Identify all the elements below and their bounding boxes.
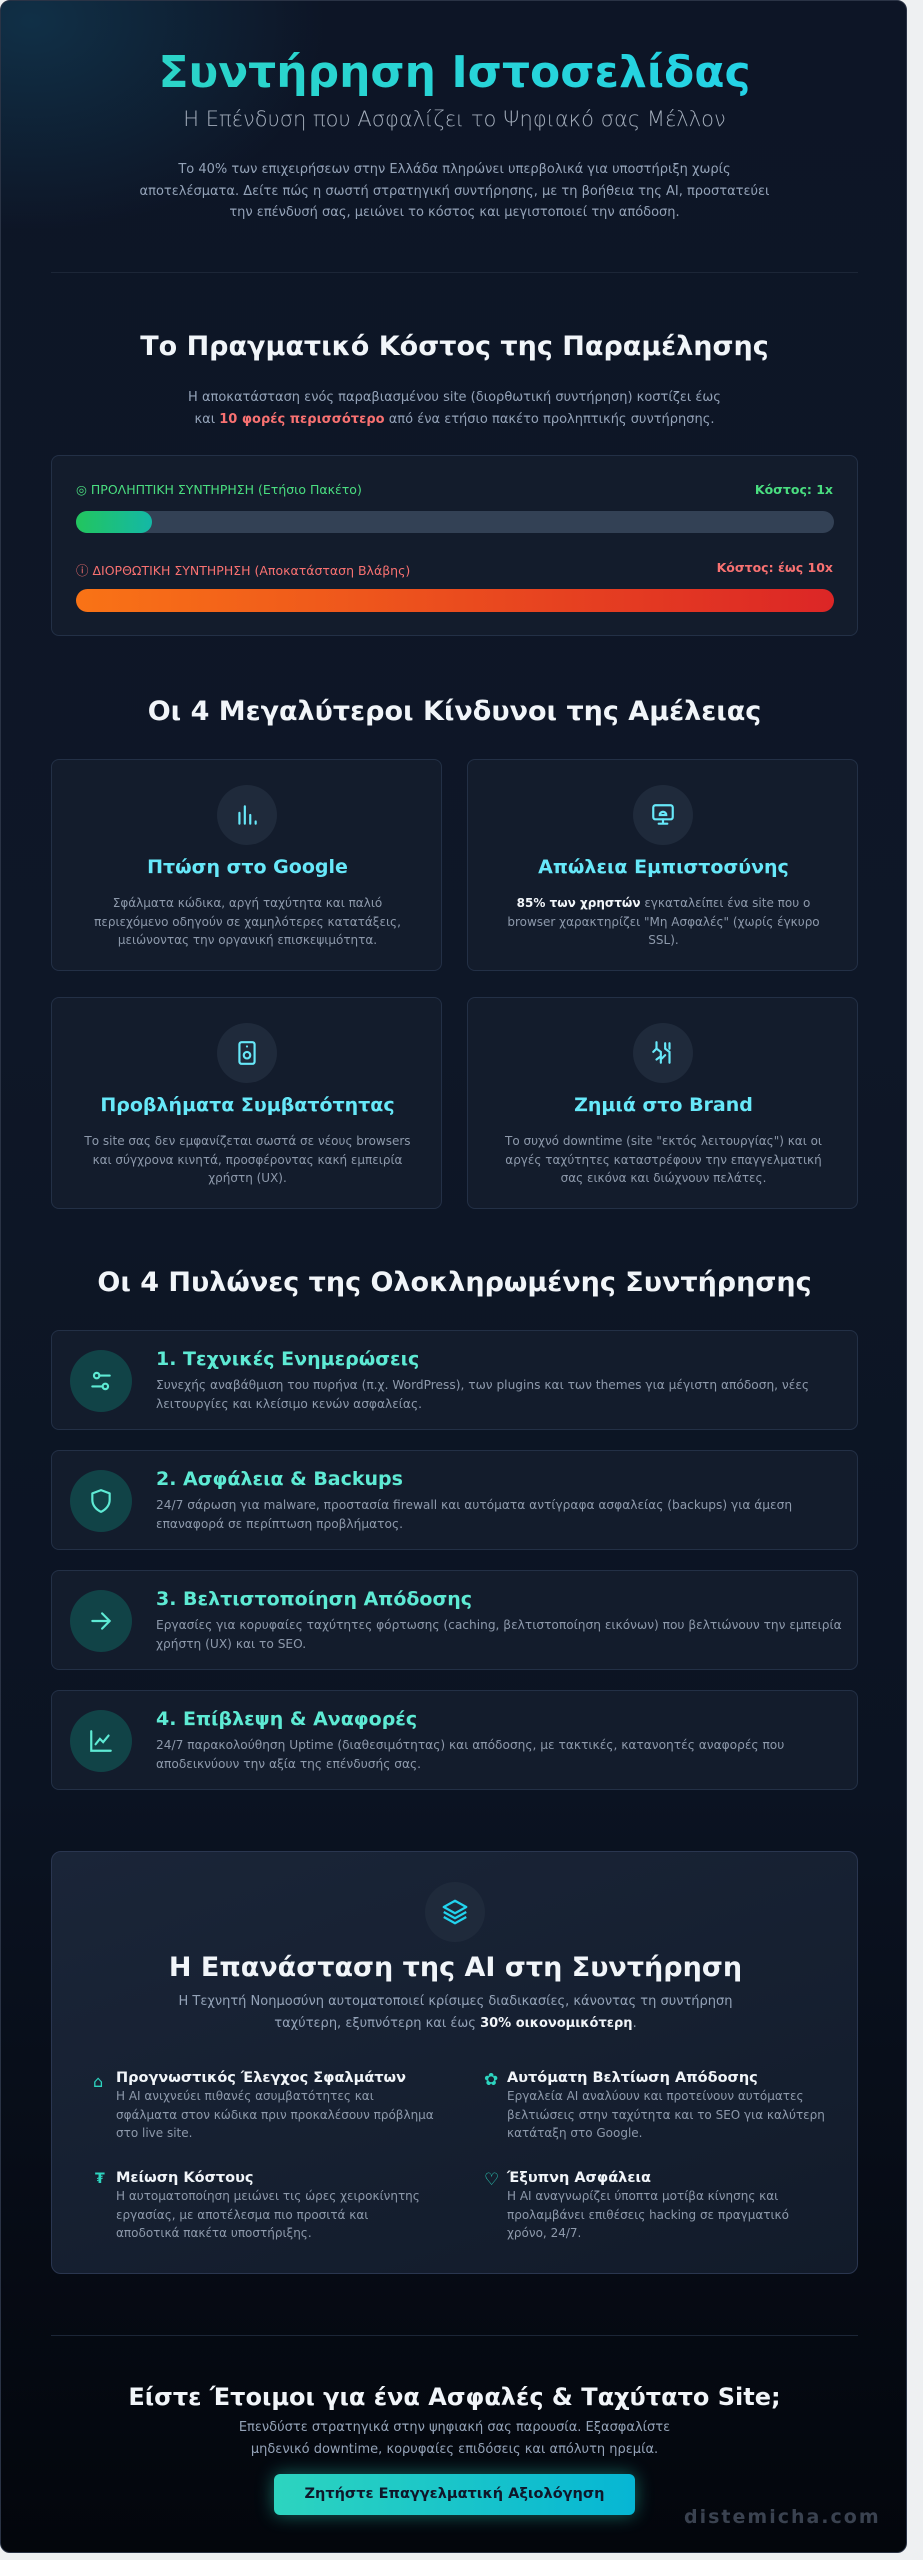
pillar text: 24/7 σάρωση για malware, προστασία firewall και αυτόματα αντίγραφα ασφαλείας (backups) για άμεση: [156, 1498, 792, 1512]
AI text: Η Τεχνητή Νοημοσύνη αυτοματοποιεί κρίσιμες διαδικασίες, κάνοντας τη συντήρηση: [178, 1994, 733, 2009]
pillar text: Συνεχής αναβάθμιση του πυρήνα (π.χ. WordPress), των plugins και των themes για μέγιστη απόδοση, νέες: [156, 1378, 809, 1392]
pillar text: αποδεικνύουν την αξία της επένδυσής σας.: [156, 1756, 421, 1770]
icon: bars: [217, 785, 277, 845]
risk text: Το site σας δεν εμφανίζεται σωστά σε νέους browsers και σύγχρονα κινητά, προσφέροντας κακή εμπειρία χρήστη (UX).: [84, 1134, 411, 1185]
cost text: [188, 390, 721, 426]
title: [1, 47, 908, 98]
icon: arrow: [70, 1590, 132, 1652]
icon: sliders: [70, 1350, 132, 1412]
icon: layers: [425, 1882, 485, 1942]
feature: cost: Μείωση Κόστους: [116, 2170, 254, 2186]
bar: corrective: [76, 589, 834, 612]
feature: smart security: προλαμβάνει επιθέσεις hacking σε πραγματικό: [507, 2208, 789, 2222]
pillar 2: [51, 1450, 858, 1550]
cost text: και 10 φορές περισσότερο από ένα ετήσιο πακέτο προληπτικής συντήρησης.: [194, 412, 715, 426]
subtitle: Η Επένδυση που Ασφαλίζει το Ψηφιακό σας Μέλλον: [183, 107, 726, 131]
risk title: Προβλήματα Συμβατότητας: [100, 1094, 395, 1116]
feature: cost: αποδοτικά πακέτα υποστήριξης.: [116, 2226, 312, 2240]
icon: monitor: [633, 785, 693, 845]
icon: ✿: [484, 2070, 498, 2090]
pillar text: επαναφορά σε περίπτωση προβλήματος.: [156, 1516, 403, 1530]
CTA text: Επενδύστε στρατηγικά στην ψηφιακή σας παρουσία. Εξασφαλίστε: [239, 2420, 670, 2435]
panel: AI revolution: [51, 1851, 858, 2274]
icon: ♡: [484, 2170, 499, 2190]
feature: predictive: σφάλματα στον κώδικα πριν προκαλέσουν πρόβλημα: [116, 2108, 434, 2122]
panel: risk compatibility: [51, 997, 442, 1209]
feature: smart security: χρόνο, 24/7.: [507, 2226, 581, 2240]
label: corrective: ⓘ ΔΙΟΡΘΩΤΙΚΗ ΣΥΝΤΗΡΗΣΗ (Αποκατάσταση Βλάβης): [76, 563, 410, 578]
pillar title: 4. Επίβλεψη & Αναφορές: [156, 1708, 417, 1730]
heading: cost of neglect: Το Πραγματικό Κόστος της Παραμέλησης: [140, 331, 769, 362]
icon: ⌂: [93, 2072, 103, 2091]
intro text: αποτελέσματα. Δείτε πώς η σωστή στρατηγική συντήρησης, με τη βοήθεια της AI, προστατεύει: [140, 184, 769, 198]
AI text: [178, 1994, 733, 2030]
value: 1x: Κόστος: 1x: [755, 482, 833, 497]
icon: ₮: [95, 2171, 105, 2187]
icon: shield: [70, 1470, 132, 1532]
pillar text: [156, 1618, 842, 1650]
feature: smart security: [484, 2170, 789, 2240]
cost text: Η αποκατάσταση ενός παραβιασμένου site (διορθωτική συντήρηση) κοστίζει έως: [188, 390, 721, 405]
feature: predictive: Η AI ανιχνεύει πιθανές ασυμβατότητες και: [116, 2089, 374, 2103]
pillar text: [156, 1498, 792, 1530]
CTA button: Ζητήστε Επαγγελματική Αξιολόγηση: [304, 2486, 604, 2502]
risk title: Απώλεια Εμπιστοσύνης: [538, 856, 789, 878]
pillar 1: [51, 1330, 858, 1430]
panel: risk trust: [467, 759, 858, 971]
feature: cost: Η αυτοματοποίηση μειώνει τις ώρες χειροκίνητης: [116, 2189, 420, 2203]
CTA heading: Είστε Έτοιμοι για ένα Ασφαλές & Ταχύτατο Site;: [128, 2383, 781, 2411]
feature: cost: εργασίας, με αποτέλεσμα πιο προσιτά και: [116, 2208, 368, 2222]
feature: smart security: Έξυπνη Ασφάλεια: [507, 2170, 651, 2186]
risk title: Πτώση στο Google: [147, 856, 348, 878]
CTA text: [239, 2420, 670, 2456]
watermark: distemicha.com: [684, 2506, 881, 2528]
risk text: 85% των χρηστών εγκαταλείπει ένα site που ο browser χαρακτηρίζει "Μη Ασφαλές" (χωρίς έγκυρο SSL).: [507, 896, 820, 947]
pillar text: χρήστη (UX) και το SEO.: [156, 1636, 306, 1650]
heading: risks: Οι 4 Μεγαλύτεροι Κίνδυνοι της Αμέλειας: [148, 696, 761, 727]
feature: auto performance: Αυτόματη Βελτίωση Απόδοσης: [507, 2070, 758, 2086]
panel: cost comparison: [51, 455, 858, 636]
feature: cost: [95, 2170, 420, 2240]
icon: device: [217, 1023, 277, 1083]
pillar text: 24/7 παρακολούθηση Uptime (διαθεσιμότητας) και απόδοσης, με τακτικές, κατανοητές αναφορές που: [156, 1738, 784, 1752]
bar: preventive: [76, 511, 834, 533]
label: preventive: ◎ ΠΡΟΛΗΠΤΙΚΗ ΣΥΝΤΗΡΗΣΗ (Ετήσιο Πακέτο): [76, 482, 362, 497]
title: Συντήρηση Ιστοσελίδας: [158, 47, 751, 98]
feature: auto performance: Εργαλεία AI αναλύουν και προτείνουν αυτόματες: [507, 2089, 804, 2103]
pillar 3: [51, 1570, 858, 1670]
pillar title: 2. Ασφάλεια & Backups: [156, 1468, 403, 1490]
pillar 4: [51, 1690, 858, 1790]
intro text: [140, 162, 769, 220]
feature: predictive: Προγνωστικός Έλεγχος Σφαλμάτων: [116, 2070, 406, 2086]
pillar title: 1. Τεχνικές Ενημερώσεις: [156, 1348, 419, 1370]
AI text: ταχύτερη, εξυπνότερη και έως 30% οικονομικότερη.: [274, 2016, 637, 2030]
feature: predictive: στο live site.: [116, 2126, 192, 2140]
risk title: Ζημιά στο Brand: [574, 1094, 753, 1116]
pillar text: [156, 1738, 784, 1770]
pillar text: λειτουργίες και κλείσιμο κενών ασφαλείας.: [156, 1396, 422, 1410]
icon: broken: [633, 1023, 693, 1083]
feature: predictive: [93, 2070, 434, 2140]
risk text: Σφάλματα κώδικα, αργή ταχύτητα και παλιό περιεχόμενο οδηγούν σε χαμηλότερες κατατάξεις, μειώνοντας την οργανική επισκεψιμότητα.: [94, 896, 401, 947]
pillar text: Εργασίες για κορυφαίες ταχύτητες φόρτωσης (caching, βελτιστοποίηση εικόνων) που βελτιώνουν την εμπειρία: [156, 1618, 842, 1632]
feature: smart security: Η AI αναγνωρίζει ύποπτα μοτίβα κίνησης και: [507, 2189, 778, 2203]
heading: pillars: Οι 4 Πυλώνες της Ολοκληρωμένης Συντήρησης: [97, 1267, 812, 1298]
CTA button: [274, 2474, 635, 2515]
pillar text: [156, 1378, 809, 1410]
CTA text: μηδενικό downtime, κορυφαίες επιδόσεις και απόλυτη ηρεμία.: [251, 2442, 658, 2456]
feature: auto performance: βελτιώσεις στην ταχύτητα και το SEO για καλύτερη: [507, 2108, 825, 2122]
value: 10x: Κόστος: έως 10x: [717, 560, 833, 575]
intro text: την επένδυσή σας, μειώνει το κόστος και μεγιστοποιεί την απόδοση.: [229, 205, 680, 220]
intro text: Το 40% των επιχειρήσεων στην Ελλάδα πληρώνει υπερβολικά για υποστήριξη χωρίς: [178, 162, 731, 177]
icon: chart: [70, 1710, 132, 1772]
panel: risk brand: [467, 997, 858, 1209]
panel: risk google: [51, 759, 442, 971]
risk text: Το συχνό downtime (site "εκτός λειτουργίας") και οι αργές ταχύτητες καταστρέφουν την επαγγελματική σας εικόνα και διώχνουν πελάτες.: [505, 1134, 822, 1185]
pillar title: 3. Βελτιστοποίηση Απόδοσης: [156, 1588, 472, 1610]
feature: auto performance: κατάταξη στο Google.: [507, 2126, 642, 2140]
AI title: Η Επανάσταση της AI στη Συντήρηση: [169, 1952, 742, 1983]
feature: auto performance: [484, 2070, 825, 2140]
